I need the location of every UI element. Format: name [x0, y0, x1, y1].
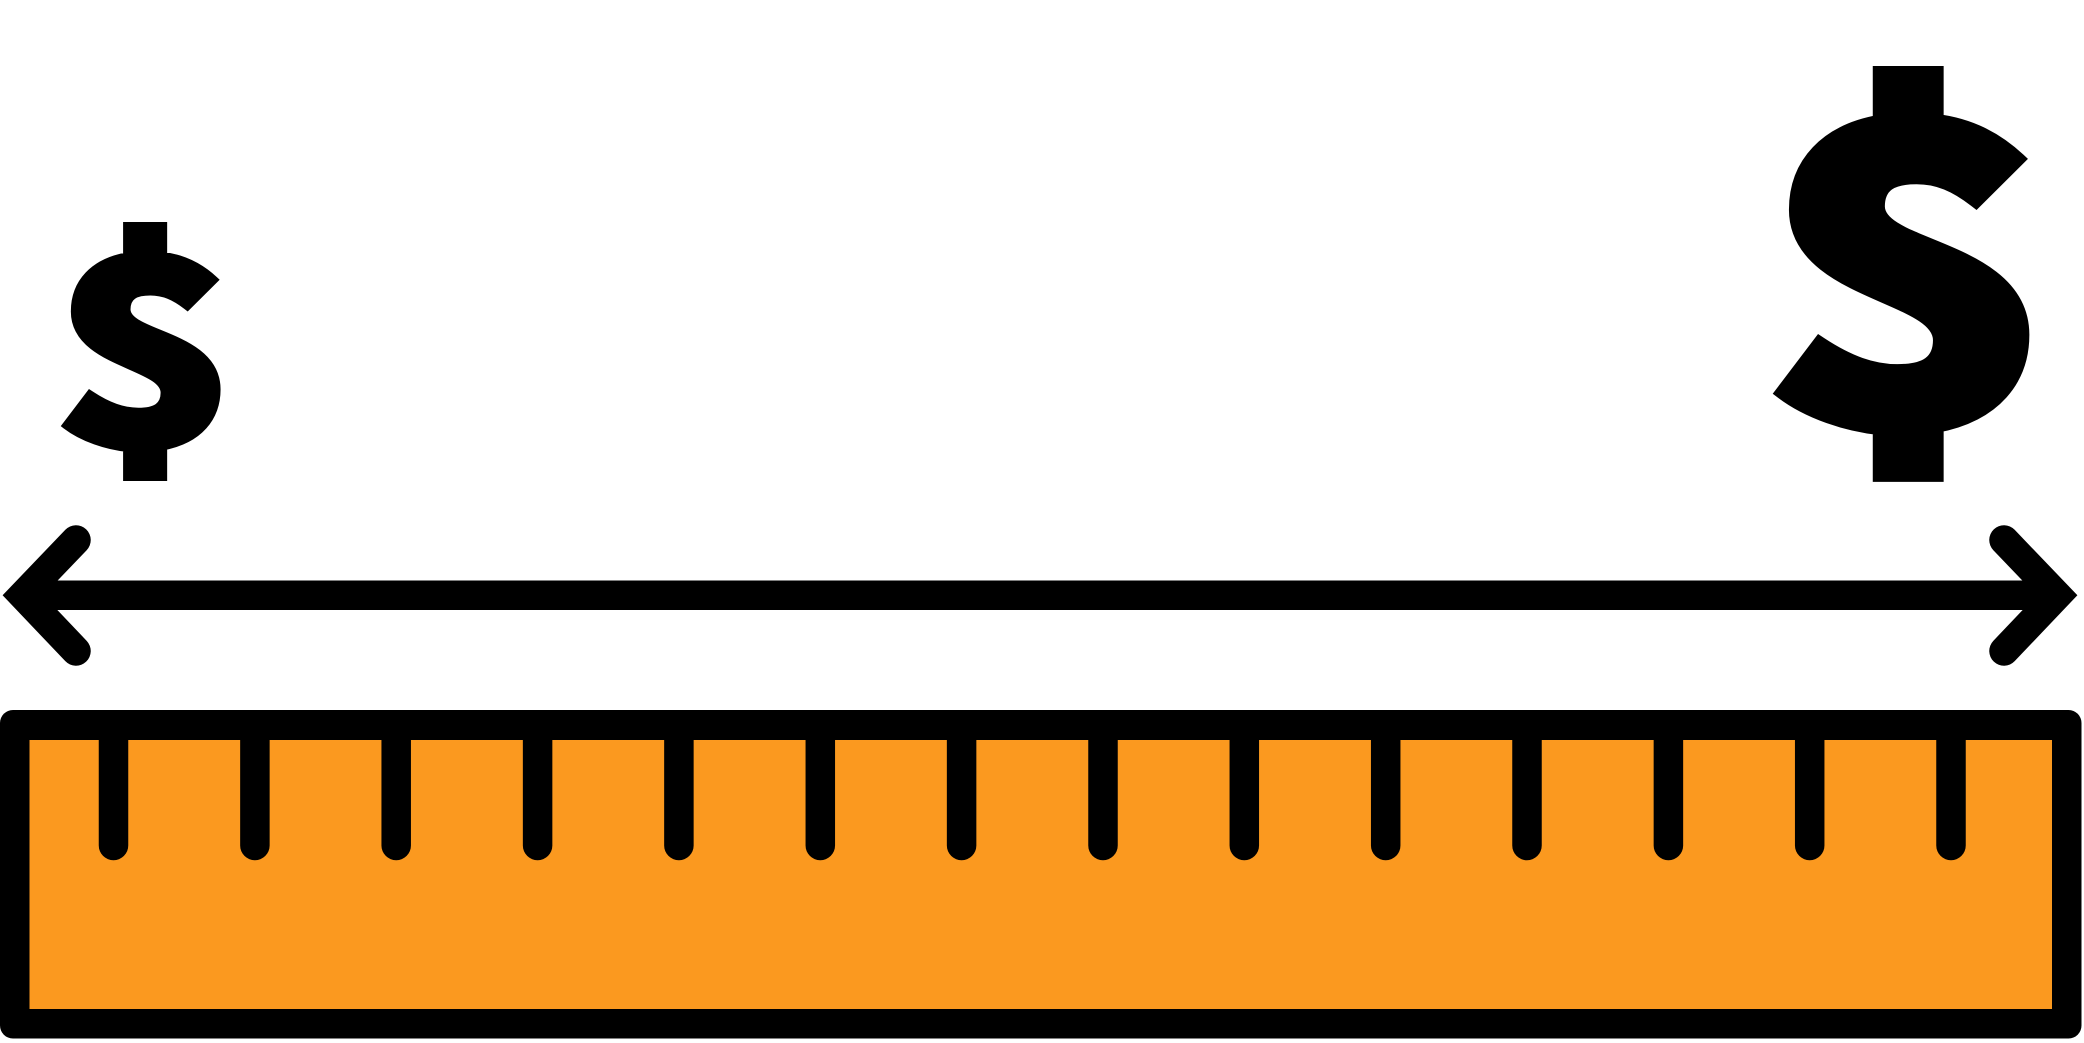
icon: small dollar sign: $	[54, 147, 237, 520]
ruler frame	[0, 710, 2082, 1038]
ruler	[0, 710, 2082, 1038]
arrow: double-headed scale arrow	[23, 540, 2057, 651]
ruler body	[30, 740, 2052, 1009]
ruler tick marks	[114, 730, 1951, 846]
